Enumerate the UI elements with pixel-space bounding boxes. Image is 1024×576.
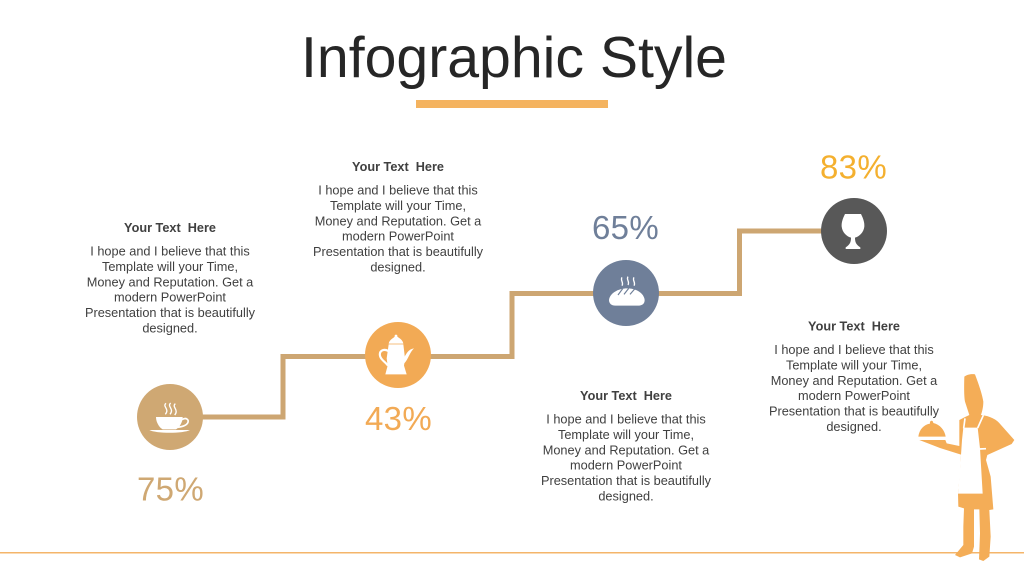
title underline	[416, 100, 608, 108]
text block 3: Your Text Here	[580, 389, 672, 403]
text block 4: modern PowerPoint	[798, 388, 910, 403]
title: Infographic Style	[301, 26, 727, 90]
text block 4: Your Text Here	[808, 320, 900, 334]
text block 1	[85, 221, 256, 336]
text block 2: Your Text Here	[352, 160, 444, 174]
text block 1: Your Text Here	[124, 221, 216, 235]
text block 3: Template will your Time,	[558, 427, 694, 442]
text block 3: Money and Reputation. Get a	[543, 442, 710, 458]
icon: coffee pot	[365, 322, 431, 388]
text block 1: I hope and I believe that this	[90, 244, 250, 258]
text block 4	[769, 320, 940, 434]
step 3: bread	[541, 209, 712, 504]
text block 4: Template will your Time,	[786, 358, 922, 372]
text block 2: Template will your Time,	[330, 198, 466, 213]
floor line	[0, 552, 1024, 554]
chef silhouette	[918, 374, 1014, 561]
text block 1: Money and Reputation. Get a	[87, 274, 254, 290]
text block 3: designed.	[598, 488, 654, 504]
icon: wine glass	[821, 198, 887, 264]
text block 4: I hope and I believe that this	[774, 342, 934, 357]
text block 1: designed.	[142, 320, 198, 336]
percentage 75%: 75%	[137, 470, 204, 508]
text block 2: designed.	[370, 260, 426, 274]
text block 3: I hope and I believe that this	[546, 412, 706, 426]
percentage 83%: 83%	[820, 148, 887, 186]
text block 2: modern PowerPoint	[342, 228, 454, 244]
icon: bread	[593, 260, 659, 326]
step 2: coffee pot	[313, 160, 484, 437]
text block 1: Template will your Time,	[102, 259, 238, 274]
text block 4: Money and Reputation. Get a	[771, 373, 938, 388]
step 1: coffee	[85, 221, 256, 508]
text block 3: Presentation that is beautifully	[541, 473, 712, 488]
text block 2: Money and Reputation. Get a	[315, 214, 482, 228]
icon: coffee cup	[137, 384, 203, 450]
percentage 43%: 43%	[365, 400, 432, 437]
text block 2	[313, 160, 484, 274]
step 4: wine	[769, 148, 940, 434]
text block 1: Presentation that is beautifully	[85, 305, 256, 320]
text block 3	[541, 389, 712, 504]
text block 3: modern PowerPoint	[570, 458, 682, 472]
text block 1: modern PowerPoint	[114, 290, 226, 304]
stepped connector line	[170, 231, 854, 417]
percentage 65%: 65%	[592, 209, 659, 246]
text block 2: I hope and I believe that this	[318, 182, 478, 198]
text block 2: Presentation that is beautifully	[313, 244, 484, 259]
text block 4: designed.	[826, 419, 882, 434]
text block 4: Presentation that is beautifully	[769, 404, 940, 418]
